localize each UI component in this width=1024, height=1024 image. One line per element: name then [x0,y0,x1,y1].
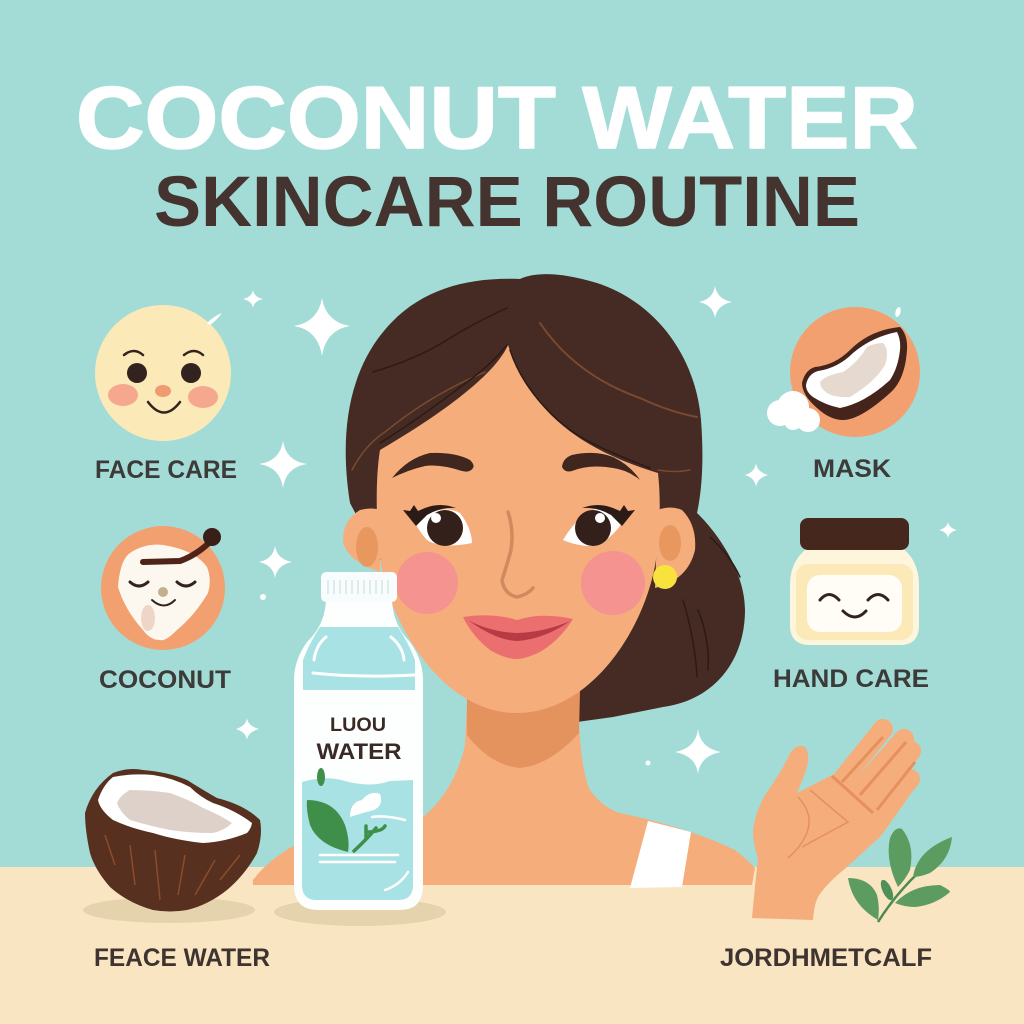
left inner ear [356,527,378,567]
palm creases [788,737,915,858]
strap [630,821,691,888]
hair [346,274,745,722]
table surface [0,867,1024,1024]
right ear [655,508,695,588]
right inner ear [659,525,681,561]
face [377,345,660,713]
nose [502,512,533,597]
label: coconut: COCONUT [99,666,231,694]
illustration: coconut half [85,769,261,912]
label: mask: MASK [813,455,891,483]
left ear [343,508,380,572]
coconut shadow [83,897,255,923]
mouth [463,615,573,659]
icon: jar [790,518,919,645]
bottle cap [321,572,397,602]
earring [653,565,677,589]
neck shadow [467,690,580,768]
mouth line [468,620,570,641]
eyebrows [392,453,474,478]
illustration: hand [752,729,920,920]
right eye [563,505,635,546]
bottle label: LUOU [330,715,386,736]
sparkles [236,286,957,774]
label: hand care: HAND CARE [773,665,929,693]
shoulders and chest [253,700,755,885]
label: face water: FEACE WATER [94,944,270,972]
blush [396,552,458,614]
hair strands [352,308,740,677]
icon: face care [95,305,231,441]
title: COCONUT WATER [76,68,918,167]
illustration: water bottle [294,572,423,910]
bottle shadow [274,898,446,926]
fingers [838,729,911,815]
label: brand: JORDHMETCALF [720,944,932,972]
bottle label: WATER [316,739,402,764]
left eye [403,505,472,546]
illustration: woman [253,274,755,888]
icon: coconut [101,526,225,650]
subtitle: SKINCARE ROUTINE [154,163,860,242]
icon: mask coconut [767,307,920,437]
bottle label [316,715,402,764]
illustration: leaves [848,828,952,922]
label: face care: FACE CARE [95,456,237,484]
